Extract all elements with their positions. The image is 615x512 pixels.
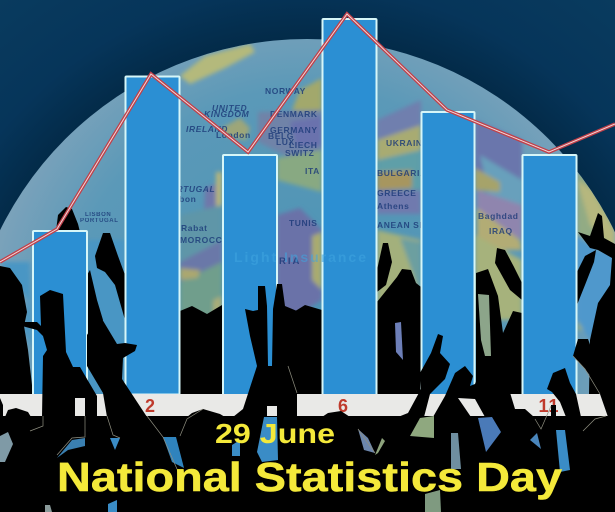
- axis numbers: 11: [538, 396, 560, 416]
- map labels: SWITZ: [285, 148, 314, 158]
- map labels: Rabat: [181, 223, 208, 233]
- faint watermark: Light Insurance: [234, 249, 366, 265]
- bar 3: [223, 155, 277, 395]
- map labels: LIECH: [289, 140, 318, 150]
- map labels: LISBON: [85, 212, 111, 218]
- map labels: Baghdad: [478, 211, 519, 221]
- bar 2: [126, 76, 180, 394]
- map labels: BELG: [268, 131, 294, 141]
- raised hand second: [87, 319, 147, 417]
- map labels: LUX: [276, 137, 295, 147]
- map labels: IRELAND: [186, 124, 228, 134]
- map gaps in silhouette: [395, 294, 491, 360]
- two finger hands: [233, 284, 297, 417]
- map labels: BULGARIA: [377, 168, 427, 178]
- map labels: TUNIS: [289, 218, 318, 228]
- hands right of centre: [433, 361, 534, 417]
- bar 5: [422, 112, 474, 395]
- edge figure left: [0, 398, 3, 417]
- map labels: UKRAINE: [386, 138, 429, 148]
- head left: [5, 408, 31, 417]
- silhouette outlines: [30, 356, 606, 469]
- raised hand left: [22, 290, 97, 417]
- map labels: PORTUGAL: [80, 218, 118, 224]
- map labels: PORTUGAL: [163, 184, 215, 194]
- map patches through the crowd: [0, 416, 570, 512]
- head under six: [322, 411, 350, 417]
- date text: 29 June: [215, 418, 335, 449]
- map labels: London: [216, 130, 251, 140]
- map labels: DENMARK: [270, 109, 318, 119]
- bar 1: [33, 231, 87, 395]
- map labels: Athens: [377, 201, 409, 211]
- axis numbers: 6: [338, 396, 348, 416]
- map labels: ANEAN SEA: [377, 220, 432, 230]
- map labels: [80, 86, 519, 267]
- finger over eleven: [551, 405, 556, 417]
- bar 4: [322, 19, 376, 395]
- map labels: GERMANY: [270, 125, 318, 135]
- trend line: [0, 14, 615, 262]
- title: National Statistics Day: [57, 454, 562, 500]
- map labels: KINGDOM: [204, 109, 250, 119]
- axis band: [0, 394, 615, 417]
- pointing hand: [398, 334, 450, 417]
- map labels: NORWAY: [265, 86, 306, 96]
- crowd silhouette in front of bars: [0, 284, 615, 417]
- head centre left: [187, 409, 225, 417]
- map labels: UNITED: [212, 103, 247, 113]
- map land areas: [0, 44, 615, 395]
- fist over eleven: [547, 368, 581, 417]
- hand right edge: [573, 339, 615, 417]
- axis numbers: [145, 396, 560, 416]
- map labels: IRAQ: [489, 226, 513, 236]
- globe with map: [0, 39, 615, 394]
- lower black area: [0, 416, 615, 512]
- band gaps between arms: [75, 398, 277, 416]
- crowd silhouette behind bars: [0, 207, 615, 394]
- bar 6: [522, 155, 576, 395]
- map labels: GREECE: [377, 188, 416, 198]
- map labels: Lisbon: [165, 194, 196, 204]
- bar chart: [33, 19, 576, 395]
- axis numbers: 2: [145, 396, 155, 416]
- map labels: ITA: [305, 166, 320, 176]
- map labels: MOROCCO: [180, 235, 230, 245]
- map labels: RIA: [279, 256, 301, 267]
